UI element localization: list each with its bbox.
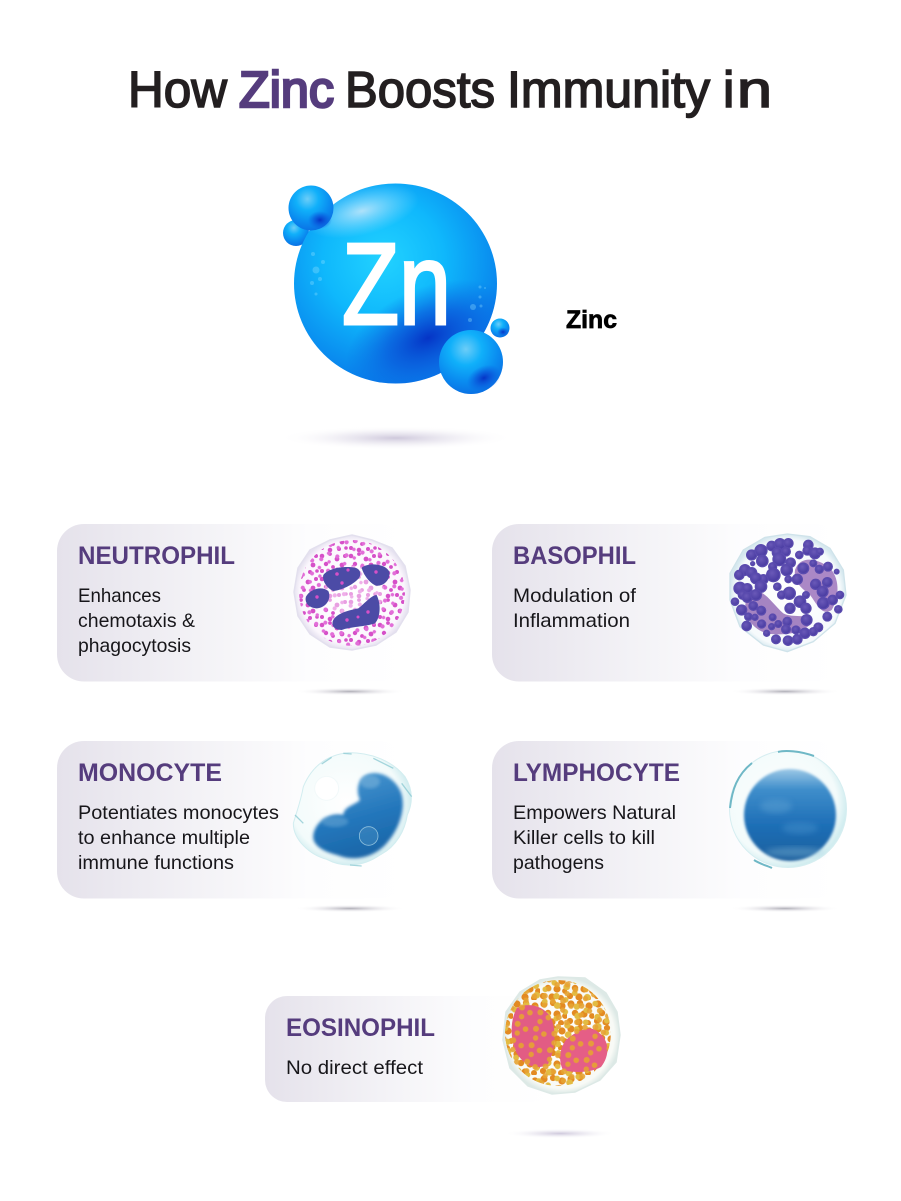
description: [513, 585, 637, 632]
panel: eosinophil: [265, 977, 620, 1138]
cell shadow: [729, 904, 841, 912]
panel: monocyte: [57, 741, 412, 912]
zinc symbol: Zn: [342, 219, 451, 349]
card background: [57, 524, 407, 682]
description: No direct effect: [286, 1057, 424, 1079]
heading: BASOPHIL: [513, 542, 636, 570]
card background: [492, 741, 842, 898]
card background: [492, 524, 842, 682]
description: chemotaxis &: [78, 610, 195, 632]
description: immune functions: [78, 852, 234, 874]
icon: basophil cell: [730, 534, 846, 652]
description: to enhance multiple: [78, 827, 250, 849]
card background: [265, 996, 555, 1102]
description: Inflammation: [513, 610, 630, 632]
title: Immunity: [507, 61, 710, 118]
description: Enhances: [78, 585, 161, 607]
molecule shadow: [278, 426, 514, 450]
description: Killer cells to kill: [513, 827, 655, 849]
title: n: [737, 61, 772, 118]
icon: eosinophil cell: [503, 977, 620, 1094]
heading: MONOCYTE: [78, 759, 222, 787]
title: How: [128, 61, 227, 118]
panel: neutrophil: [57, 524, 410, 696]
description: Modulation of: [513, 585, 637, 607]
title: Zinc: [239, 61, 334, 118]
card background: [57, 741, 407, 898]
icon: zinc molecule: [283, 184, 510, 394]
description: [513, 802, 676, 874]
description: phagocytosis: [78, 635, 191, 657]
heading: EOSINOPHIL: [286, 1014, 435, 1042]
title: i: [723, 61, 734, 118]
cell shadow: [294, 688, 406, 696]
description: [78, 585, 195, 657]
heading: LYMPHOCYTE: [513, 759, 680, 787]
icon: lymphocyte cell: [730, 750, 846, 868]
title: Boosts: [345, 61, 495, 118]
zinc label: Zinc: [566, 306, 617, 334]
icon: neutrophil cell: [294, 535, 410, 650]
description: pathogens: [513, 852, 604, 874]
panel: basophil: [492, 524, 846, 696]
cell shadow: [504, 1128, 616, 1138]
description: [78, 802, 279, 874]
heading: NEUTROPHIL: [78, 542, 235, 570]
description: Potentiates monocytes: [78, 802, 279, 824]
title: [128, 61, 772, 118]
description: Empowers Natural: [513, 802, 676, 824]
cell shadow: [729, 688, 841, 696]
panel: lymphocyte: [492, 741, 846, 912]
icon: monocyte cell: [293, 753, 412, 866]
cell shadow: [294, 904, 406, 912]
